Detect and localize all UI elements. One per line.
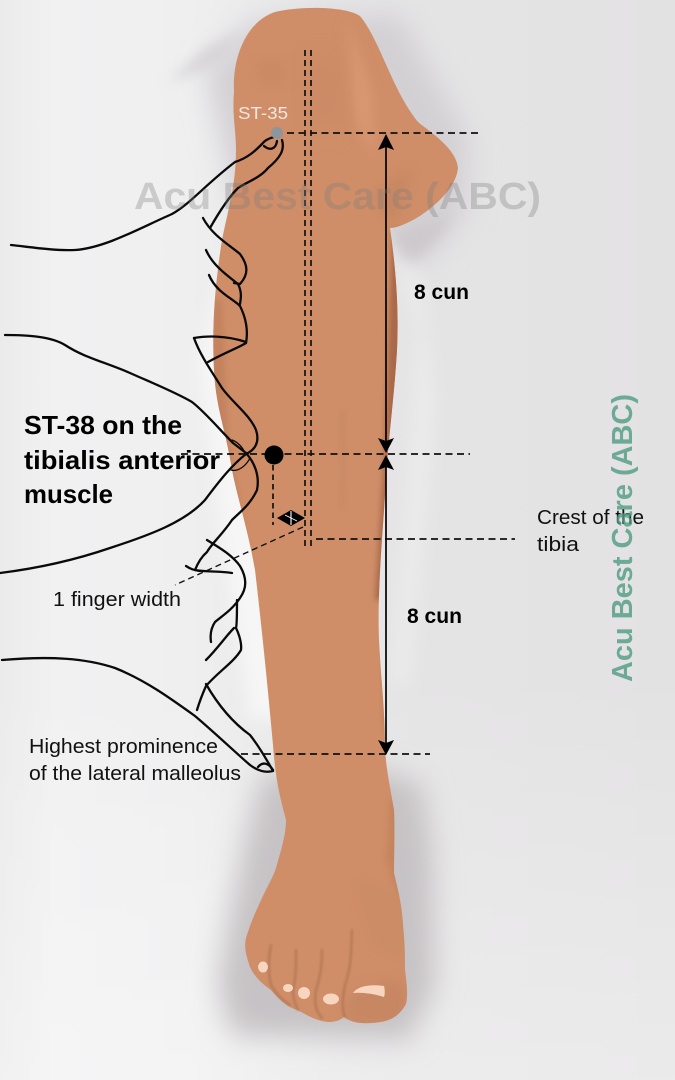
- measurement guides: horizontal dashed levels: [175, 133, 515, 754]
- middle hand: [5, 335, 258, 573]
- lower fingers: [207, 540, 245, 642]
- watermark: horizontal: Acu Best Care (ABC): [134, 176, 541, 218]
- acupoint: ST-35: [271, 127, 283, 139]
- label: highest prominence of the lateral malleolus: of the lateral malleolus: [29, 762, 241, 785]
- watermark: vertical green: Acu Best Care (ABC): [607, 394, 639, 682]
- heading: ST-38 on the tibialis anterior muscle: muscle: [24, 479, 113, 509]
- label: crest of the tibia: Crest of the: [537, 507, 644, 529]
- label: highest prominence of the lateral malleolus: Highest prominence: [29, 735, 218, 758]
- label: highest prominence of the lateral malleolus: [29, 735, 241, 785]
- illustration: leg and foot: [210, 8, 458, 1024]
- label: lower 8 cun: 8 cun: [407, 605, 462, 628]
- foot: toe creases: [269, 930, 352, 1018]
- lower hand and index fingertip: [2, 658, 273, 772]
- acupoint: ST-38: [264, 446, 284, 464]
- heading: ST-38 on the tibialis anterior muscle: tibialis anterior: [24, 445, 220, 475]
- toenails: [258, 962, 385, 1004]
- arrow: upper 8 cun span: [378, 134, 394, 453]
- heading: ST-38 on the tibialis anterior muscle: ST-38 on the: [24, 410, 182, 440]
- arrow: lower 8 cun span: [378, 455, 394, 755]
- label: ST-35: ST-35: [238, 103, 288, 123]
- upper hand and thumb: [11, 137, 274, 250]
- measurement guide: crest of the tibia double dashed line: [305, 50, 311, 548]
- label: 1 finger width: 1 finger width: [53, 589, 181, 611]
- heading: ST-38 on the tibialis anterior muscle: [24, 410, 220, 509]
- hand outline: palpating fingers: [0, 137, 283, 772]
- label: crest of the tibia: tibia: [537, 534, 580, 556]
- arrow: one finger width: [277, 510, 305, 526]
- label: upper 8 cun: 8 cun: [414, 281, 469, 304]
- label: crest of the tibia: [537, 507, 644, 556]
